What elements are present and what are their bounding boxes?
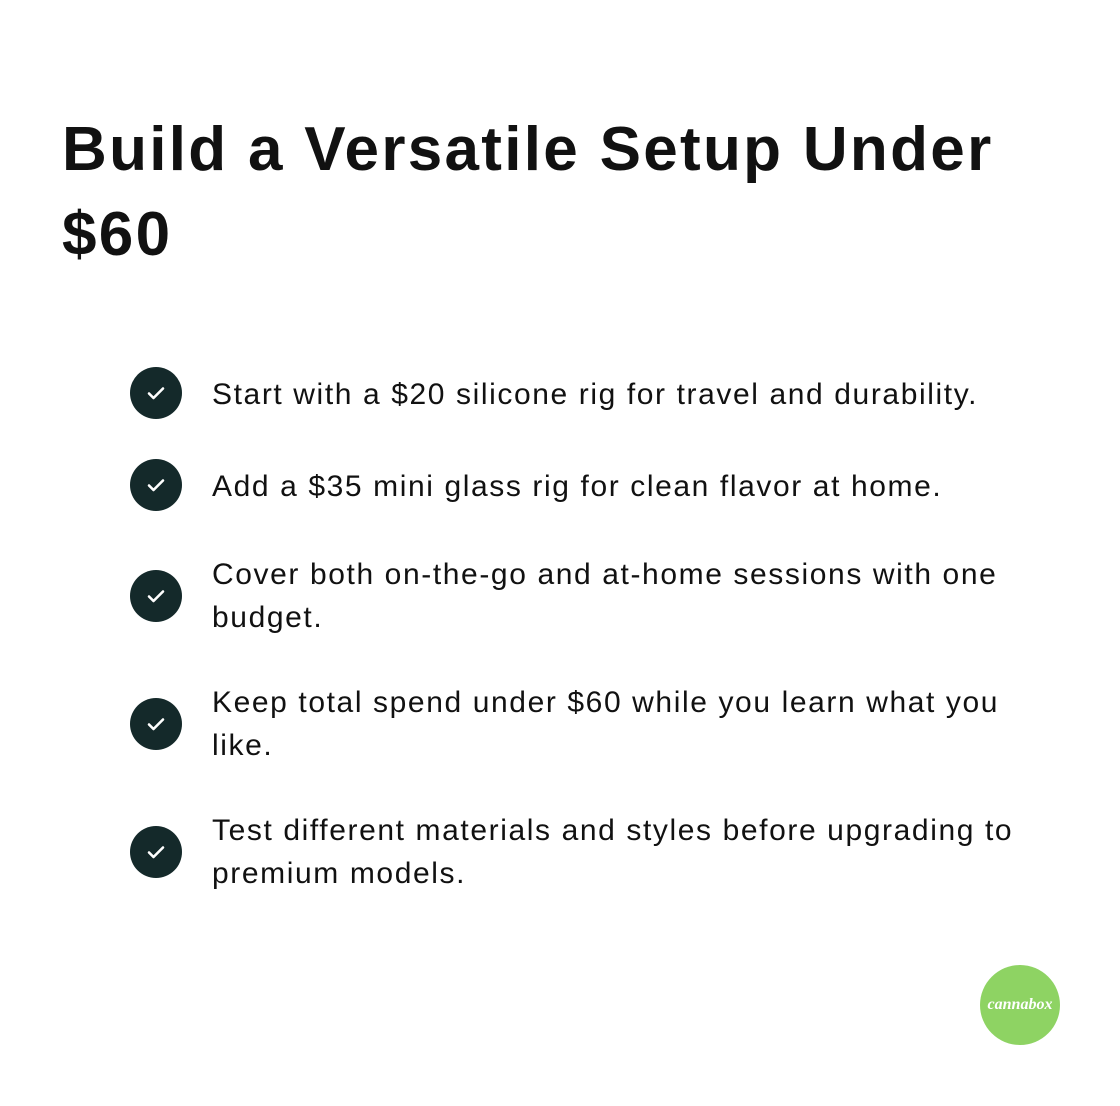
logo: cannabox: cannabox <box>988 996 1052 1013</box>
icon: check <box>130 826 182 878</box>
item 2 <box>130 459 942 511</box>
text: Start with a $20 silicone rig for travel and durability. <box>212 378 978 411</box>
text: Add a $35 mini glass rig for clean flavor at home. <box>212 470 942 503</box>
title: $60 <box>62 200 172 269</box>
icon: check <box>130 570 182 622</box>
text: Keep total spend under $60 while you learn what you like. <box>212 686 999 762</box>
logo: cannabox <box>980 965 1060 1045</box>
icon: check <box>130 367 182 419</box>
icon: check <box>130 459 182 511</box>
icon: check <box>130 698 182 750</box>
item 5 <box>130 814 1013 890</box>
item 1 <box>130 367 978 419</box>
text: Test different materials and styles before upgrading to premium models. <box>212 814 1013 890</box>
item 3 <box>130 558 997 634</box>
title: Build a Versatile Setup Under <box>62 115 994 184</box>
title <box>62 115 994 269</box>
item 4 <box>130 686 999 762</box>
text: Cover both on-the-go and at-home sessions with one budget. <box>212 558 997 634</box>
